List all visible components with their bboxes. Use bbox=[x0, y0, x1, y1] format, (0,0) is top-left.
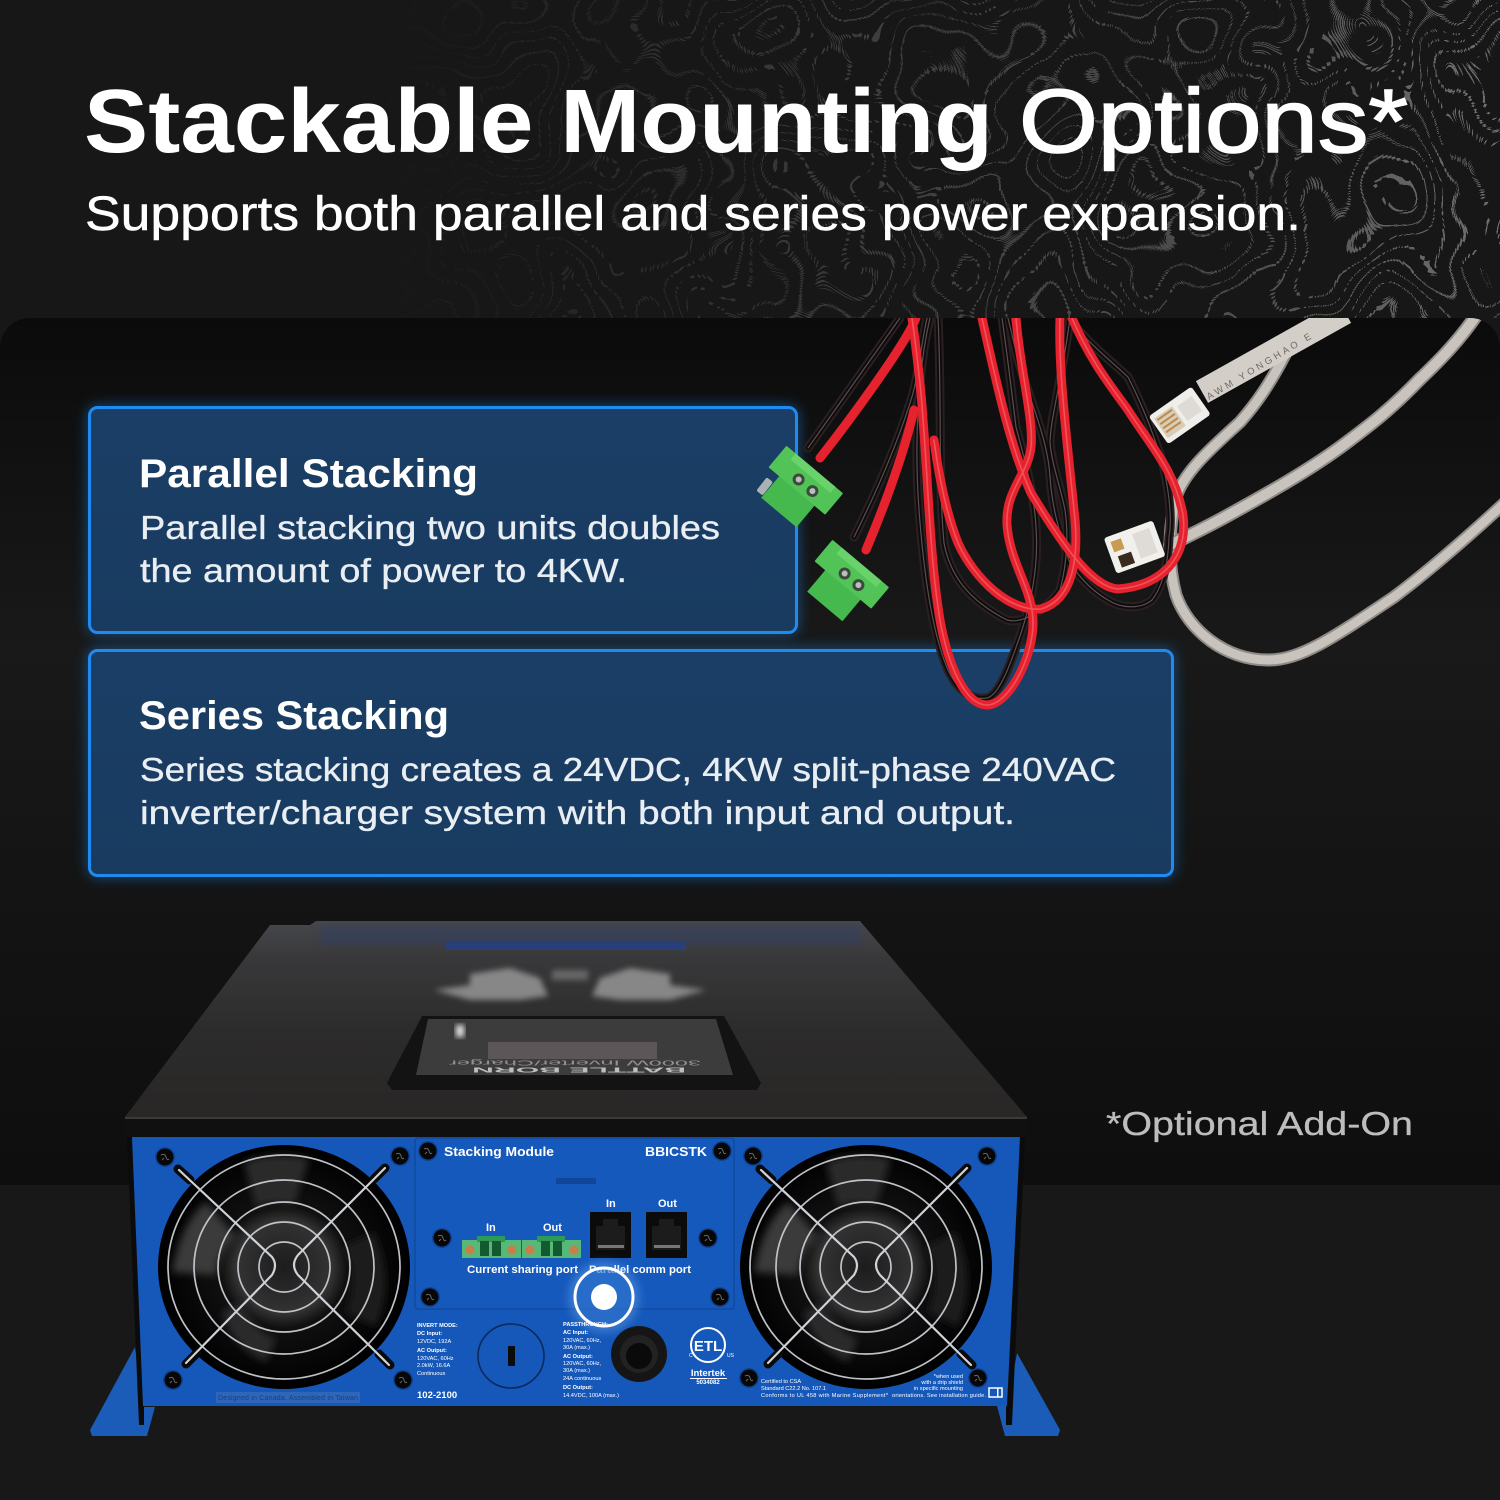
passthrough specs: 120VAC, 60Hz, bbox=[563, 1338, 602, 1344]
ETL mark: Intertek bbox=[691, 1368, 726, 1379]
optional add-on note: *Optional Add-On bbox=[1106, 1105, 1413, 1142]
cable print: AWM YONGHAO E bbox=[1205, 331, 1313, 403]
top blue reflection bbox=[320, 926, 860, 950]
invert mode specs: 2.0kW, 16.6A bbox=[417, 1363, 451, 1369]
certification text: Conforms to UL 458 with Marine Supplement* bbox=[761, 1393, 889, 1399]
chassis lip bbox=[125, 1117, 1027, 1137]
remote display plate bbox=[387, 1016, 761, 1090]
black wires bbox=[808, 318, 1170, 698]
chassis top bbox=[125, 921, 1027, 1117]
ETL mark bbox=[689, 1328, 735, 1386]
certification text: with a drip shield bbox=[920, 1380, 963, 1386]
made-in sticker bbox=[216, 1392, 360, 1403]
title: Stackable Mounting bbox=[84, 72, 993, 172]
module labels: Out bbox=[658, 1198, 677, 1210]
passthrough specs: PASSTHROUGH: bbox=[563, 1322, 608, 1328]
title bbox=[84, 72, 1408, 172]
callout: series stacking: Series stacking creates a 24VDC, 4KW split-phase 240VAC bbox=[140, 751, 1116, 788]
knockout circle bbox=[478, 1324, 544, 1388]
made-in sticker: Designed in Canada. Assembled in Taiwan bbox=[218, 1395, 358, 1402]
parallel comm ports bbox=[590, 1212, 687, 1258]
current sharing port bbox=[462, 1236, 581, 1258]
callout: parallel stacking: the amount of power to 4KW. bbox=[140, 552, 627, 589]
module labels bbox=[444, 1144, 708, 1276]
invert mode specs: 120VAC, 60Hz bbox=[417, 1356, 454, 1362]
manual icon bbox=[989, 1388, 1002, 1397]
inverter unit bbox=[90, 921, 1060, 1436]
stacking cables bbox=[808, 310, 1500, 705]
passthrough specs: 30A (max.) bbox=[563, 1345, 590, 1351]
passthrough specs: AC Output: bbox=[563, 1354, 593, 1360]
ETL mark: ETL bbox=[694, 1338, 722, 1355]
breaker knob bbox=[611, 1326, 667, 1382]
module labels: BBICSTK bbox=[645, 1144, 708, 1159]
black wire sheen bbox=[808, 318, 1170, 698]
module labels: Stacking Module bbox=[444, 1144, 554, 1159]
ETL mark: 5034082 bbox=[696, 1380, 720, 1386]
mounting feet bbox=[90, 1347, 1060, 1436]
subtitle: Supports both parallel and series power expansion. bbox=[85, 188, 1301, 241]
remote display plate: BATTLE BORN bbox=[472, 1066, 686, 1072]
module labels: Out bbox=[543, 1222, 562, 1234]
certification text: in specific mounting bbox=[914, 1386, 963, 1392]
invert mode specs: 102-2100 bbox=[417, 1390, 457, 1401]
topographic line pattern bbox=[486, 0, 1500, 318]
fan right bbox=[740, 1145, 992, 1389]
passthrough specs: 24A continuous bbox=[563, 1376, 601, 1382]
plug: lower RJ connector bbox=[1104, 520, 1166, 574]
green terminal connector 1 bbox=[750, 446, 843, 536]
black wire core bbox=[808, 318, 1170, 698]
passthrough specs: 14.4VDC, 100A (max.) bbox=[563, 1393, 619, 1399]
invert mode specs: DC Input: bbox=[417, 1331, 442, 1337]
blurred logo bbox=[434, 968, 706, 1000]
invert mode specs: AC Output: bbox=[417, 1348, 447, 1354]
callout: series stacking: inverter/charger system with both input and output. bbox=[140, 794, 1015, 831]
chassis side strips bbox=[127, 1137, 1025, 1425]
invert mode specs: INVERT MODE: bbox=[417, 1323, 458, 1329]
floor band bbox=[0, 1185, 1500, 1500]
title: Options* bbox=[1019, 72, 1408, 172]
module slot bbox=[556, 1178, 596, 1184]
module labels: In bbox=[486, 1222, 496, 1234]
highlighted indicator hotspot bbox=[568, 1261, 640, 1333]
plug: upper RJ connector bbox=[1149, 387, 1211, 444]
callout: parallel stacking bbox=[88, 406, 798, 634]
callout: parallel stacking: Parallel stacking two units doubles bbox=[140, 509, 720, 546]
stacking module plate bbox=[415, 1138, 734, 1309]
certification text: orientations. See installation guide. bbox=[892, 1393, 986, 1399]
ETL mark: US bbox=[727, 1353, 735, 1359]
grey flat cables bbox=[1170, 310, 1500, 660]
passthrough specs bbox=[563, 1322, 619, 1399]
certification text: Certified to CSA bbox=[761, 1379, 801, 1385]
ETL mark: C bbox=[689, 1353, 693, 1359]
callout: parallel stacking: Parallel Stacking bbox=[139, 452, 478, 496]
passthrough specs: DC Output: bbox=[563, 1385, 593, 1391]
invert mode specs: Continuous bbox=[417, 1371, 446, 1377]
remote display plate: 3000W Inverter/Charger bbox=[447, 1058, 701, 1066]
panel screws bbox=[155, 1141, 997, 1390]
callout: series stacking: Series Stacking bbox=[139, 694, 449, 738]
passthrough specs: AC Input: bbox=[563, 1330, 588, 1336]
callout: series stacking bbox=[88, 649, 1174, 877]
dark content panel bbox=[0, 318, 1500, 1185]
certification text: Standard C22.2 No. 107.1 bbox=[761, 1386, 826, 1392]
certification text: *when used bbox=[934, 1374, 963, 1380]
passthrough specs: 120VAC, 60Hz, bbox=[563, 1361, 602, 1367]
certification text bbox=[761, 1374, 986, 1399]
invert mode specs bbox=[417, 1323, 458, 1401]
passthrough specs: 30A (max.) bbox=[563, 1368, 590, 1374]
fan left bbox=[158, 1145, 410, 1389]
module labels: Parallel comm port bbox=[589, 1264, 691, 1276]
module labels: In bbox=[606, 1198, 616, 1210]
red wires bbox=[820, 318, 1184, 705]
invert mode specs: 12VDC, 192A bbox=[417, 1339, 451, 1345]
green terminal connector 2 bbox=[796, 540, 889, 630]
module labels: Current sharing port bbox=[467, 1264, 578, 1276]
blue back panel bbox=[132, 1137, 1020, 1406]
wire highlights bbox=[912, 318, 1184, 705]
